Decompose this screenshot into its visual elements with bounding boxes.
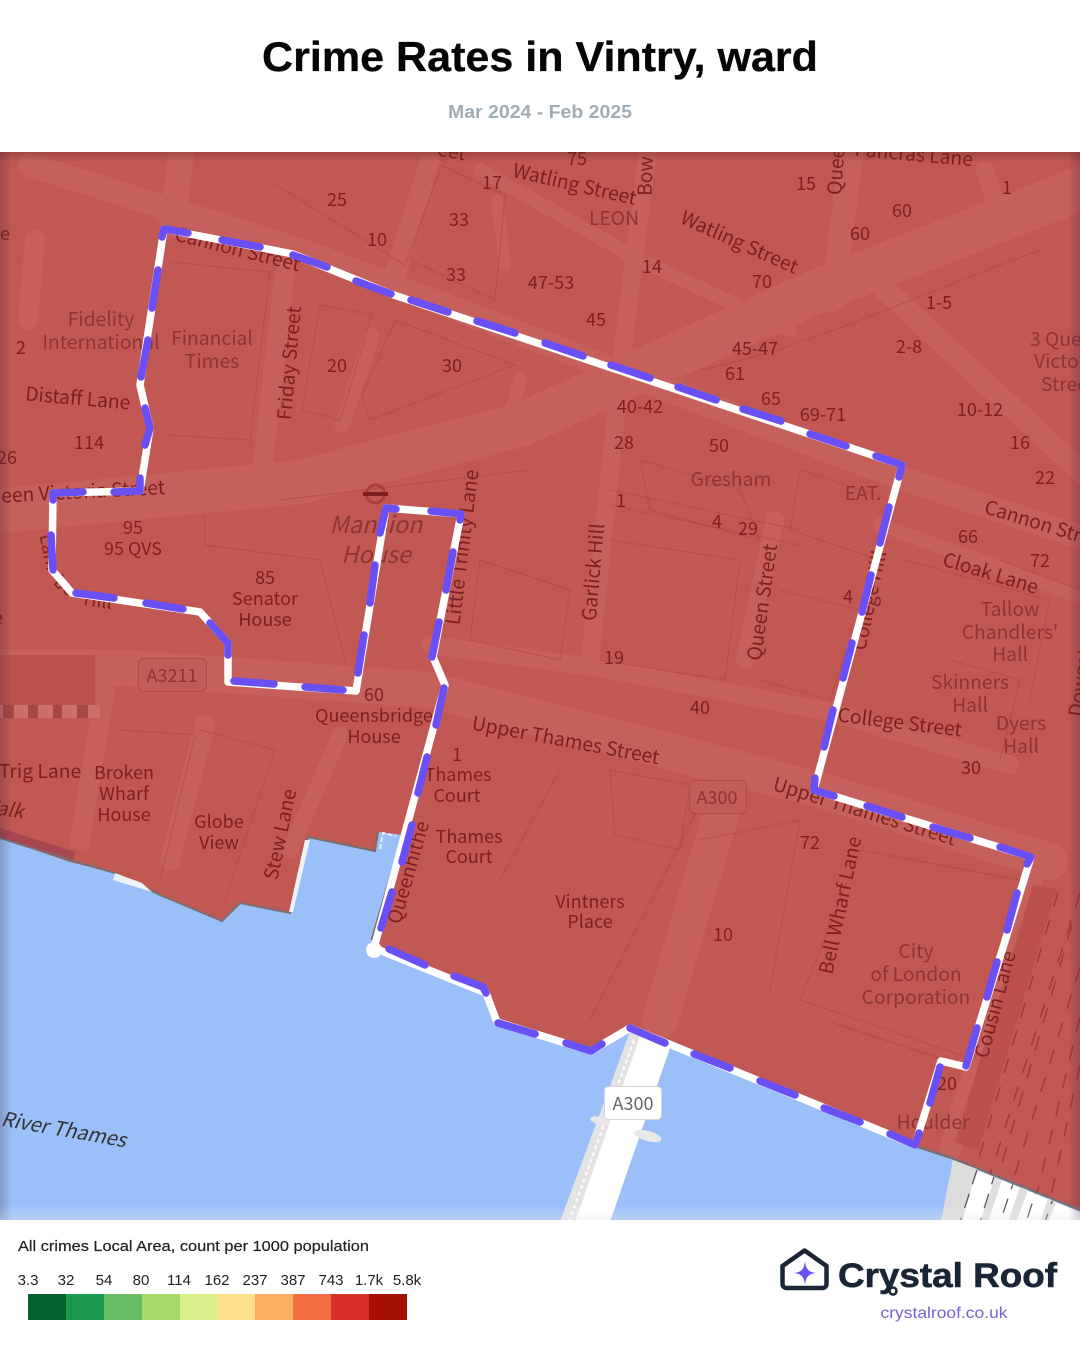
legend scale values: 162 xyxy=(204,1272,230,1289)
map labels: buildings and places: 85 xyxy=(255,564,275,590)
boundary dashes xyxy=(51,229,1031,1145)
map labels: house numbers: 4 xyxy=(712,508,722,534)
map labels: house numbers: 20 xyxy=(327,352,347,378)
map land base xyxy=(0,152,1080,1220)
map labels: house numbers: 66 xyxy=(958,523,978,549)
legend colour swatches xyxy=(28,1294,407,1320)
road shield: A300 upper xyxy=(690,780,746,814)
legend scale values: 54 xyxy=(96,1272,112,1289)
map labels: house numbers: 20 xyxy=(937,1070,957,1096)
map labels: buildings and places: Queensbridge xyxy=(315,702,433,728)
map labels: house numbers: 60 xyxy=(850,220,870,246)
map labels: house numbers: 10 xyxy=(367,226,387,252)
map labels: streets: eet xyxy=(436,134,468,166)
website: crystalroof.co.uk xyxy=(880,1305,1009,1322)
map labels: house numbers: 40-42 xyxy=(617,393,663,419)
brand name: Crystal Roof xyxy=(838,1257,1058,1295)
map labels: house numbers: 19 xyxy=(604,644,624,670)
map labels: buildings and places: Vintners xyxy=(555,888,625,914)
map labels: buildings and places: City xyxy=(899,936,933,964)
map labels: buildings and places: Times xyxy=(185,346,239,374)
railway bridge xyxy=(941,1160,1080,1222)
river thames water xyxy=(0,832,1080,1230)
map labels: buildings and places: Gresham xyxy=(691,464,771,492)
legend scale values: 387 xyxy=(280,1272,306,1289)
map labels: streets: Stew Lane xyxy=(256,786,302,882)
map labels: house numbers: 33 xyxy=(449,206,469,232)
map labels: buildings and places: International xyxy=(42,327,160,355)
map labels: buildings and places: House xyxy=(97,801,151,827)
map labels: buildings and places: Thames xyxy=(425,761,491,787)
road shield: A3211: A3211 xyxy=(147,662,197,688)
road shield: A300 on bridge: A300 xyxy=(613,1090,653,1116)
building outlines xyxy=(120,165,1080,1060)
legend scale values: 5.8k xyxy=(393,1272,422,1289)
road shield: A300 on bridge xyxy=(604,1086,662,1120)
map labels: buildings and places: 1 xyxy=(452,741,462,767)
map labels: house numbers: 72 xyxy=(800,829,820,855)
map labels: buildings and places: Skinners xyxy=(931,667,1009,695)
legend scale values: 80 xyxy=(133,1272,149,1289)
ward boundary xyxy=(51,229,1031,1145)
map labels: buildings and places xyxy=(42,203,1080,1135)
map labels: streets: Queenhithe xyxy=(379,817,435,927)
bridge: A300 Southwark Bridge xyxy=(560,1032,670,1222)
map labels: streets: Distaff Lane xyxy=(24,378,132,416)
map labels: house numbers: 16 xyxy=(1010,429,1030,455)
map labels: buildings and places: Senator xyxy=(232,585,299,611)
map labels: house numbers: 69-71 xyxy=(800,401,846,427)
legend scale values: 32 xyxy=(58,1272,74,1289)
map edge vignette xyxy=(0,152,1080,1220)
map labels: streets: e xyxy=(0,220,10,246)
map labels: house numbers: 17 xyxy=(482,169,502,195)
map labels: streets: Pancras Lane xyxy=(854,134,974,172)
map labels: buildings and places: Broken xyxy=(94,759,154,785)
map labels: house numbers: 61 xyxy=(725,360,745,386)
map labels: streets: College Hill xyxy=(844,548,892,652)
legend title: All crimes Local Area, count per 1000 population xyxy=(18,1238,369,1255)
map labels: buildings and places: Thames xyxy=(436,823,502,849)
map labels: buildings and places: Hall xyxy=(1003,731,1039,759)
map labels: buildings and places: Corporation xyxy=(862,982,970,1010)
map labels: house numbers: 33 xyxy=(446,261,466,287)
map labels: buildings and places: Court xyxy=(445,843,493,869)
map labels: buildings and places: House xyxy=(341,536,413,570)
icon: y tail dot xyxy=(890,1288,896,1294)
map labels: house numbers: 50 xyxy=(709,432,729,458)
map labels: house numbers: 72 xyxy=(1030,547,1050,573)
map labels: streets: College Street xyxy=(836,699,964,743)
map labels: buildings and places: 60 xyxy=(364,681,384,707)
map labels: streets: Bell Wharf Lane xyxy=(811,834,867,976)
rail crossing block, left edge xyxy=(0,655,100,718)
legend scale values xyxy=(18,1272,422,1289)
map labels: buildings and places: 95 QVS xyxy=(104,535,162,561)
map labels: buildings and places: View xyxy=(199,829,239,855)
road network xyxy=(0,150,1080,1150)
map labels: streets: Friday Street xyxy=(269,305,307,421)
railway track lines xyxy=(978,892,1080,1194)
map labels: buildings and places: Place xyxy=(567,908,613,934)
map labels: buildings and places: Tallow xyxy=(981,594,1039,622)
riverbank edge xyxy=(0,828,1080,1210)
map labels: house numbers: 60 xyxy=(892,197,912,223)
map labels: house numbers: 22 xyxy=(1035,464,1055,490)
title: Crime Rates in Vintry, ward xyxy=(262,33,818,80)
map labels: buildings and places: House xyxy=(238,606,292,632)
map labels: house numbers: 45-47 xyxy=(732,335,778,361)
road shield: A300 upper: A300 xyxy=(697,784,737,810)
map labels: house numbers: 14 xyxy=(642,253,662,279)
map labels: house numbers: 15 xyxy=(796,170,816,196)
map labels: buildings and places: LEON xyxy=(589,203,639,231)
subtitle: date range: Mar 2024 - Feb 2025 xyxy=(448,102,632,122)
map labels: buildings and places: Globe xyxy=(194,808,244,834)
legend scale values: 237 xyxy=(242,1272,268,1289)
icon: house with star xyxy=(782,1250,826,1288)
map labels: buildings and places: Financial xyxy=(171,323,253,351)
map labels: house numbers: 25 xyxy=(327,186,347,212)
map labels: buildings and places: Hall xyxy=(952,690,988,718)
map labels: buildings and places: EAT. xyxy=(845,478,881,506)
map labels: buildings and places: Hall xyxy=(992,639,1028,667)
map labels: streets: Cousin Lane xyxy=(966,947,1022,1061)
map labels: house numbers: 45 xyxy=(586,306,606,332)
map labels: house numbers: 28 xyxy=(614,429,634,455)
map labels: house numbers: 10-12 xyxy=(957,396,1003,422)
map labels: buildings and places: of London xyxy=(870,959,962,987)
map labels: streets: be xyxy=(49,568,81,602)
road shield: A3211 xyxy=(138,658,206,692)
map labels: buildings and places: Dyers xyxy=(996,708,1046,736)
legend scale values: 114 xyxy=(167,1272,191,1289)
railway viaduct block xyxy=(955,885,1057,1150)
map labels: buildings and places: Court xyxy=(433,782,481,808)
map labels: buildings and places: Chandlers' xyxy=(962,617,1058,645)
map labels: streets xyxy=(0,108,1080,1061)
map labels: house numbers: 70 xyxy=(752,268,772,294)
legend scale values: 3.3 xyxy=(18,1272,38,1289)
map labels: house numbers: 65 xyxy=(761,385,781,411)
map labels: streets: Watling Street xyxy=(677,203,803,279)
map labels: buildings and places: Fidelity xyxy=(68,304,134,332)
legend scale values: 1.7k xyxy=(355,1272,384,1289)
map labels: streets: Little Trinity Lane xyxy=(438,468,484,626)
map labels: house numbers: 4 xyxy=(843,583,853,609)
map labels: streets: Garlick Hill xyxy=(574,522,610,622)
map labels: house numbers: 1 xyxy=(1002,174,1012,200)
map labels: house numbers: 29 xyxy=(738,515,758,541)
map labels: buildings and places: Houlder xyxy=(896,1107,970,1135)
map labels: house numbers: 114 xyxy=(74,429,104,455)
map labels: streets: Lam xyxy=(33,531,67,573)
map labels: streets: Bow Lane xyxy=(629,108,661,196)
map labels: streets: Hill xyxy=(82,585,114,615)
map labels: house numbers: 1 xyxy=(616,487,626,513)
map labels: house numbers: 75 xyxy=(567,145,587,171)
logo: Crystal Roof xyxy=(782,1250,1058,1322)
map labels: streets: Queen St xyxy=(819,112,853,196)
map labels: house numbers: 40 xyxy=(690,694,710,720)
map labels: streets: Upper Thames Street xyxy=(470,708,662,770)
map labels: streets: Watling Street xyxy=(510,155,640,211)
map labels: house numbers: 30 xyxy=(961,754,981,780)
legend scale values: 743 xyxy=(318,1272,344,1289)
map labels: streets: Trig Lane xyxy=(0,756,81,784)
underground station roundel xyxy=(363,485,388,503)
map labels: house numbers: 10 xyxy=(713,921,733,947)
river label: River Thames xyxy=(0,1103,130,1154)
map labels: buildings and places: 95 xyxy=(123,514,143,540)
map labels: streets: Cloak Lane xyxy=(940,544,1042,600)
map labels: buildings and places: Wharf xyxy=(99,780,150,806)
map labels: house numbers: 2-8 xyxy=(896,333,922,359)
map labels: house numbers: 1-5 xyxy=(926,289,952,315)
map labels: streets: Cannon Street xyxy=(172,219,304,277)
map labels: house numbers xyxy=(0,145,1055,1096)
map labels: buildings and places: House xyxy=(347,723,401,749)
map labels: streets: Queen Street xyxy=(739,542,783,662)
map labels: house numbers: 2 xyxy=(16,334,26,360)
map labels: buildings and places: Mansion xyxy=(330,506,424,540)
legend xyxy=(18,1238,422,1320)
map labels: streets: Upper Thames Street xyxy=(770,769,960,851)
map labels: house numbers: 30 xyxy=(442,352,462,378)
map labels: house numbers: 47-53 xyxy=(528,269,574,295)
